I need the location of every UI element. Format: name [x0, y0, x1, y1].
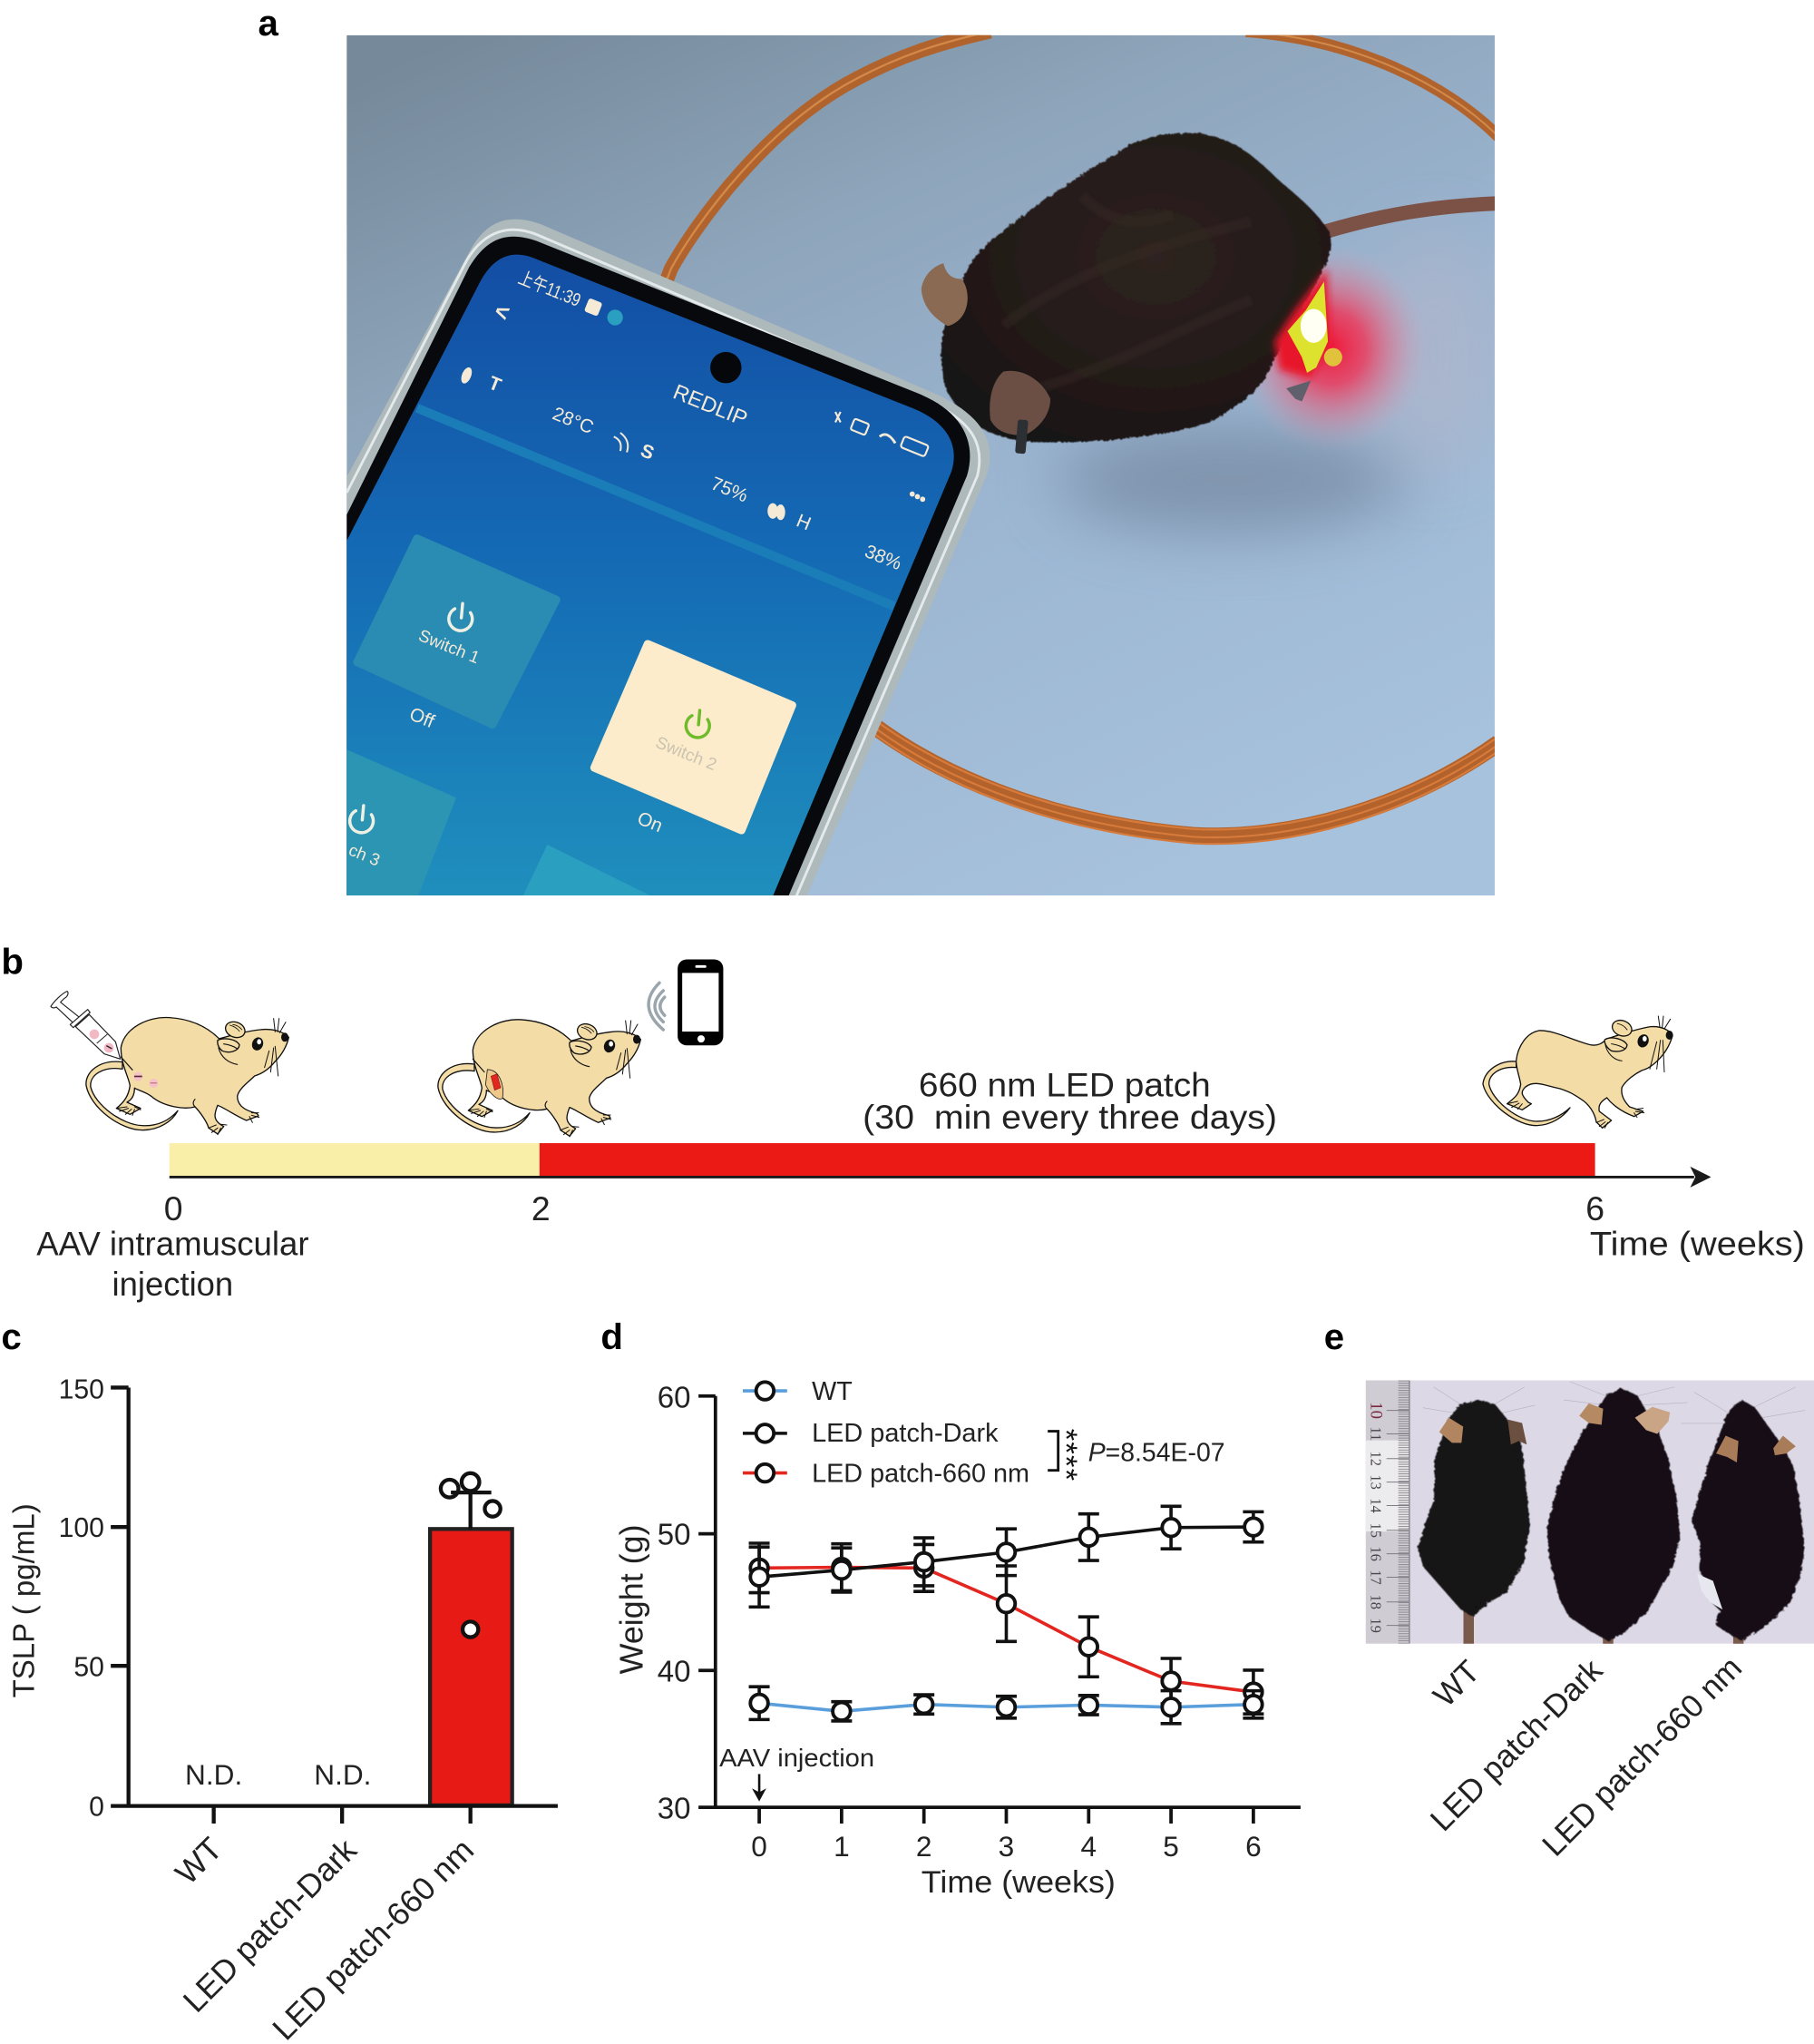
phone status icons: [459, 298, 929, 520]
x tick labels: 1: [834, 1830, 850, 1863]
power icons: [350, 603, 709, 833]
timeline tick labels: 2: [532, 1189, 551, 1227]
panel e labels: LED patch-Dark: [1424, 1652, 1610, 1838]
LED patch label: (30 min every three days): [863, 1098, 1277, 1136]
phone screen text: REDLIP: [669, 380, 750, 432]
phone screen text: 上午11:39: [515, 268, 583, 311]
x-axis category labels: [169, 1831, 481, 2044]
x tick labels: 3: [999, 1830, 1014, 1863]
x-axis category labels: LED patch-660 nm: [266, 1832, 481, 2044]
panel e: photo of three mice: [1366, 1381, 1814, 1645]
LED patch label: 660 nm LED patch: [919, 1065, 1211, 1103]
ruler: 19: [1367, 1618, 1384, 1633]
icon: syringe: [51, 992, 121, 1059]
mouse: LED patch-660 nm: [1694, 1403, 1801, 1645]
x tick labels: 2: [916, 1830, 931, 1863]
phone screen text: [346, 268, 904, 870]
panel c: TSLP bar chart: [7, 1375, 558, 2044]
AAV label: AAV intramuscular: [36, 1225, 309, 1263]
AAV label: injection: [112, 1265, 233, 1303]
LED patch label: [863, 1065, 1277, 1136]
ruler: 14: [1367, 1498, 1384, 1513]
phone screen text: 28°C: [550, 403, 597, 438]
red LED glow: [1255, 254, 1415, 444]
AAV injection annotation: AAV injection: [719, 1744, 874, 1772]
y tick labels: 50: [658, 1519, 690, 1552]
icon: rat with LED patch: [438, 1020, 640, 1137]
icon: wireless waves: [649, 983, 665, 1030]
phone screen text: S: [638, 440, 657, 465]
panel label b: b: [1, 941, 24, 982]
axes: [698, 1396, 1301, 1824]
timeline red segment: [540, 1143, 1595, 1177]
x tick labels: [751, 1830, 1262, 1863]
phone screen text: <: [491, 298, 513, 327]
mouse whiskers: [1423, 1382, 1805, 1423]
timeline tick labels: [164, 1189, 1604, 1227]
icon: thin rat at week 6: [1483, 1016, 1673, 1128]
data points: [441, 1473, 501, 1638]
switch 4 card: [523, 845, 649, 895]
phone screen text: Off: [406, 704, 437, 732]
x tick labels: 6: [1245, 1830, 1262, 1863]
significance bracket: [1048, 1432, 1058, 1471]
LED patch on rat: [485, 1070, 503, 1099]
front camera: [710, 352, 742, 383]
phone screen text: T: [485, 373, 504, 396]
y-axis tick labels: 50: [73, 1653, 104, 1683]
panel label e: e: [1324, 1316, 1344, 1357]
black mouse: [922, 133, 1331, 454]
P value: P=8.54E-07: [1088, 1439, 1225, 1468]
ruler: 15: [1367, 1523, 1384, 1538]
timeline tick labels: 6: [1585, 1189, 1604, 1227]
y tick labels: 40: [658, 1655, 690, 1688]
panel label d: d: [600, 1316, 623, 1357]
phone screen: [346, 255, 954, 899]
ruler: 16: [1367, 1546, 1384, 1561]
wireless coil: [658, 31, 1498, 844]
x tick labels: 4: [1080, 1830, 1097, 1863]
ruler: 10: [1366, 1402, 1385, 1419]
ruler: 17: [1367, 1570, 1384, 1585]
timeline yellow segment: [170, 1143, 540, 1177]
phone case: [346, 220, 990, 899]
panel d: weight line chart: [612, 1377, 1301, 1900]
y-axis tick labels: 0: [89, 1792, 104, 1822]
y-axis tick labels: 100: [59, 1513, 104, 1543]
y-axis title: TSLP ( pg/mL): [7, 1503, 41, 1697]
panel e labels: WT: [1427, 1654, 1487, 1714]
error bar: [451, 1492, 492, 1529]
bar: LED patch-660 nm: [430, 1529, 512, 1805]
legend: LED patch-660 nm: [812, 1460, 1029, 1489]
y axis title: Weight (g): [612, 1524, 649, 1674]
x axis title: Time (weeks): [922, 1865, 1116, 1900]
switch 2 card (on): [594, 644, 793, 830]
injection sites: [133, 1072, 158, 1088]
phone bezel: [346, 237, 970, 899]
phone screen text: H: [794, 510, 814, 534]
phone screen text: Switch 2: [653, 732, 719, 774]
icon: smartphone: [678, 959, 723, 1045]
phone screen text: On: [634, 807, 666, 836]
x tick labels: 0: [751, 1830, 767, 1863]
switch 1 card: [357, 538, 557, 725]
phone screen text: 38%: [862, 541, 904, 574]
panel a: photo of mouse and phone: [346, 31, 1498, 899]
panel e labels: [1424, 1650, 1749, 1863]
icon: rat with syringe: [51, 992, 288, 1135]
y tick labels: 30: [658, 1792, 690, 1825]
panel label c: c: [1, 1316, 22, 1357]
series: WT: [749, 1687, 1263, 1724]
N.D. labels: N.D.: [185, 1758, 242, 1791]
x tick labels: 5: [1163, 1830, 1179, 1863]
phone screen text: Switch 1: [416, 625, 483, 667]
y-axis tick labels: [59, 1375, 104, 1822]
switch 3 card: [346, 749, 456, 899]
panel label a: a: [258, 3, 278, 44]
series: LED patch-Dark: [749, 1506, 1263, 1607]
screen divider band: [417, 408, 894, 606]
y tick labels: [658, 1382, 690, 1825]
LED patch light: [1274, 269, 1342, 402]
y-axis tick labels: 150: [59, 1375, 104, 1405]
phone screen text: ch 3: [346, 840, 383, 870]
ruler: [1366, 1381, 1410, 1644]
mouse: WT: [1420, 1403, 1527, 1645]
y tick labels: 60: [658, 1382, 690, 1415]
N.D. labels: [185, 1758, 371, 1791]
AAV label: [36, 1225, 309, 1303]
timeline axis arrow: [170, 1167, 1711, 1188]
significance stars: ****: [1048, 1429, 1083, 1481]
phone screen text: 75%: [708, 473, 751, 506]
x-axis category labels: WT: [169, 1831, 229, 1892]
time label: Time (weeks): [1590, 1225, 1805, 1263]
panel e labels: LED patch-660 nm: [1536, 1650, 1749, 1863]
mouse tail: [1324, 203, 1498, 232]
N.D. labels: N.D.: [314, 1758, 371, 1791]
ruler: 12: [1367, 1451, 1384, 1466]
axes: [111, 1387, 558, 1824]
mouse: LED patch-Dark: [1549, 1391, 1678, 1645]
ruler: 13: [1367, 1474, 1384, 1490]
legend: WT: [812, 1377, 853, 1406]
series: LED patch-660 nm: [749, 1543, 1263, 1714]
legend: [743, 1377, 1029, 1489]
mouse ears: [922, 263, 968, 326]
arrow: AAV injection: [752, 1774, 766, 1802]
x-axis category labels: LED patch-Dark: [176, 1832, 364, 2020]
panel b: timeline: [36, 1065, 1805, 1303]
ruler: 18: [1367, 1595, 1384, 1609]
legend: LED patch-Dark: [812, 1419, 999, 1448]
timeline tick labels: 0: [164, 1189, 182, 1227]
ear tag: [1015, 419, 1029, 454]
ruler: 11: [1367, 1426, 1384, 1441]
